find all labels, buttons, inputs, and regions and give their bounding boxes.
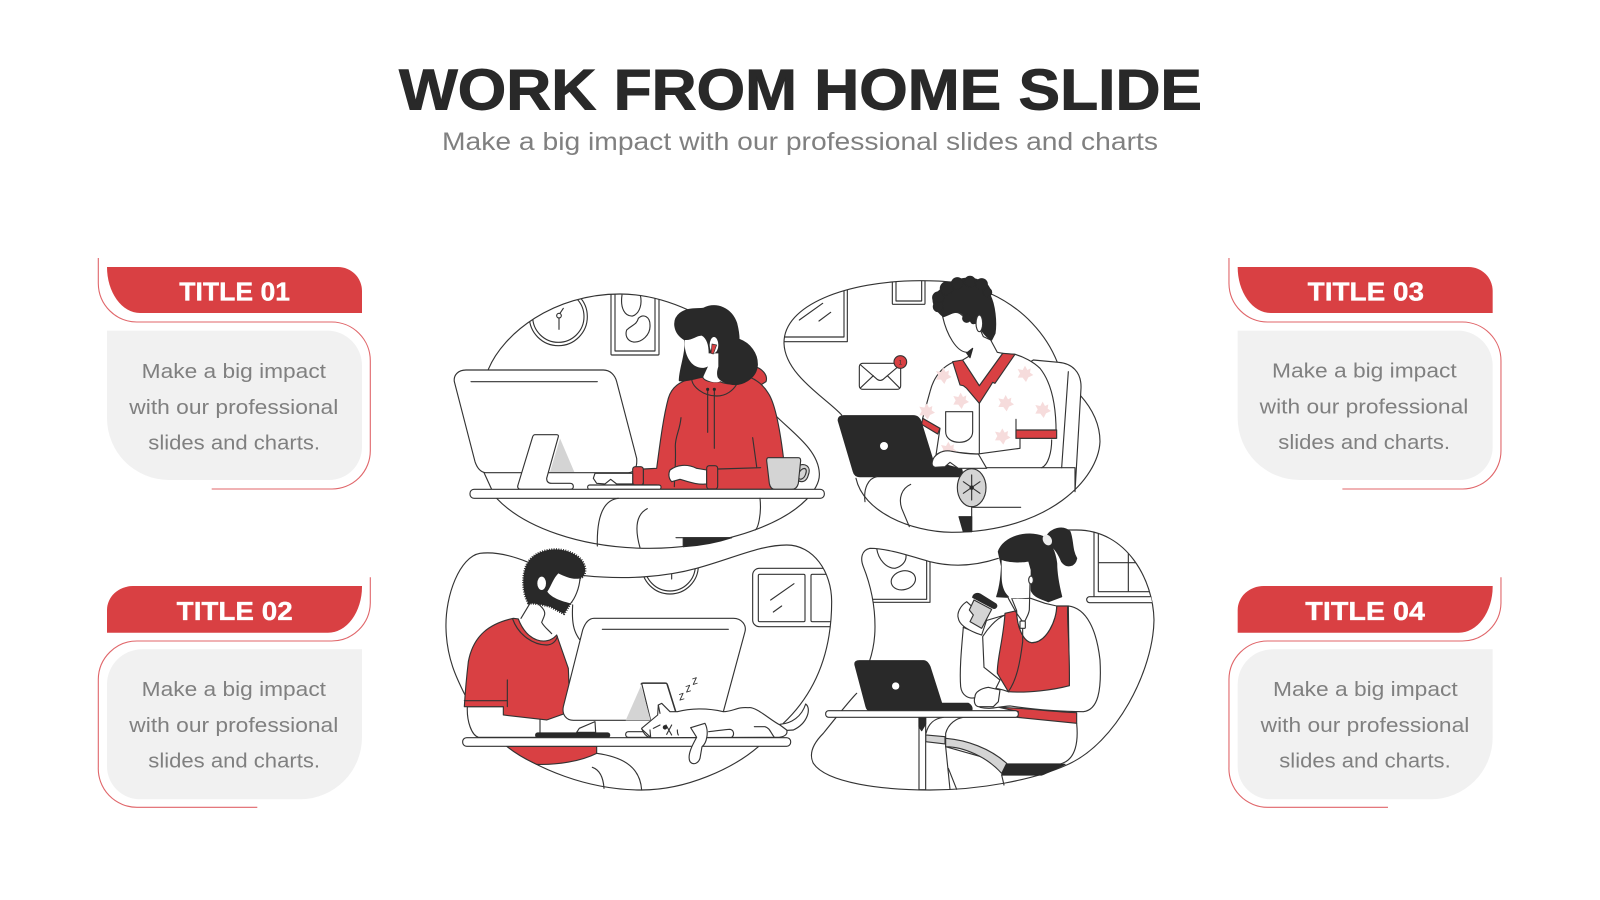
panel: title 02: slides and charts. [148,751,320,773]
window [784,290,848,342]
sleeping cat [642,673,808,764]
panel: title 01: with our professional [128,397,338,419]
envelope icon [859,356,907,389]
hoodie body [643,367,784,489]
panel: title 04 [1229,577,1501,807]
arms [960,606,1100,712]
sleep zzz [675,673,700,704]
panel: title 03 [1229,258,1501,489]
mug [767,458,809,489]
panel: title 02 [98,577,370,807]
panel: title 03: Make a big impact [1272,360,1457,382]
laptop [855,661,1000,711]
sleep zzz: z [675,688,686,704]
window [1093,532,1149,596]
panel: title 02: Make a big impact [142,679,327,701]
panel: title 01 [98,258,370,489]
panel: title 01: Make a big impact [142,361,327,383]
panel: title 04: TITLE 04 [1305,596,1426,626]
panel: title 02: with our professional [128,715,338,737]
desktop monitor [563,618,745,720]
laptop [838,416,987,477]
legs [597,498,760,548]
head and hair [675,306,757,384]
chair and seat [970,360,1081,492]
panel: title 03: with our professional [1259,396,1468,418]
sleep zzz: z [689,673,700,688]
desk [826,711,1018,790]
illustration: woman in red hoodie at desktop [454,283,824,548]
subtitle: Make a big impact with our professional slides and charts [442,128,1158,156]
head, hair and beard [523,549,585,634]
keyboards and desk [463,722,791,746]
tank top [997,606,1077,723]
envelope icon: 1 [898,359,902,366]
title: WORK FROM HOME SLIDE [399,58,1202,122]
coffee cup [958,593,997,635]
fan [957,469,986,507]
shirt [919,353,1057,468]
illustration: woman with coffee on laptop [811,527,1157,790]
illustration: bearded man with sleeping cat [446,537,858,790]
legs and chair [926,717,1077,789]
panel: title 01: slides and charts. [148,433,320,455]
illustration: man with patterned shirt on laptop [780,275,1100,532]
shirt [464,603,642,790]
panel: title 04: slides and charts. [1279,751,1451,773]
panel: title 03: slides and charts. [1278,432,1450,454]
panel: title 01: TITLE 01 [179,276,290,306]
wall frame [873,548,930,602]
panel: title 04: with our professional [1260,715,1469,737]
panel: title 02: TITLE 02 [177,596,293,626]
hands and cuffs [593,465,718,489]
head and hair [933,276,1003,386]
keyboard and desk [470,485,824,498]
legs and stool [865,477,1021,532]
panel: title 03: TITLE 03 [1308,276,1424,306]
head and hair [997,528,1077,692]
panel: title 04: Make a big impact [1273,679,1458,701]
sleep zzz: z [682,680,693,696]
desktop monitor [454,370,637,489]
